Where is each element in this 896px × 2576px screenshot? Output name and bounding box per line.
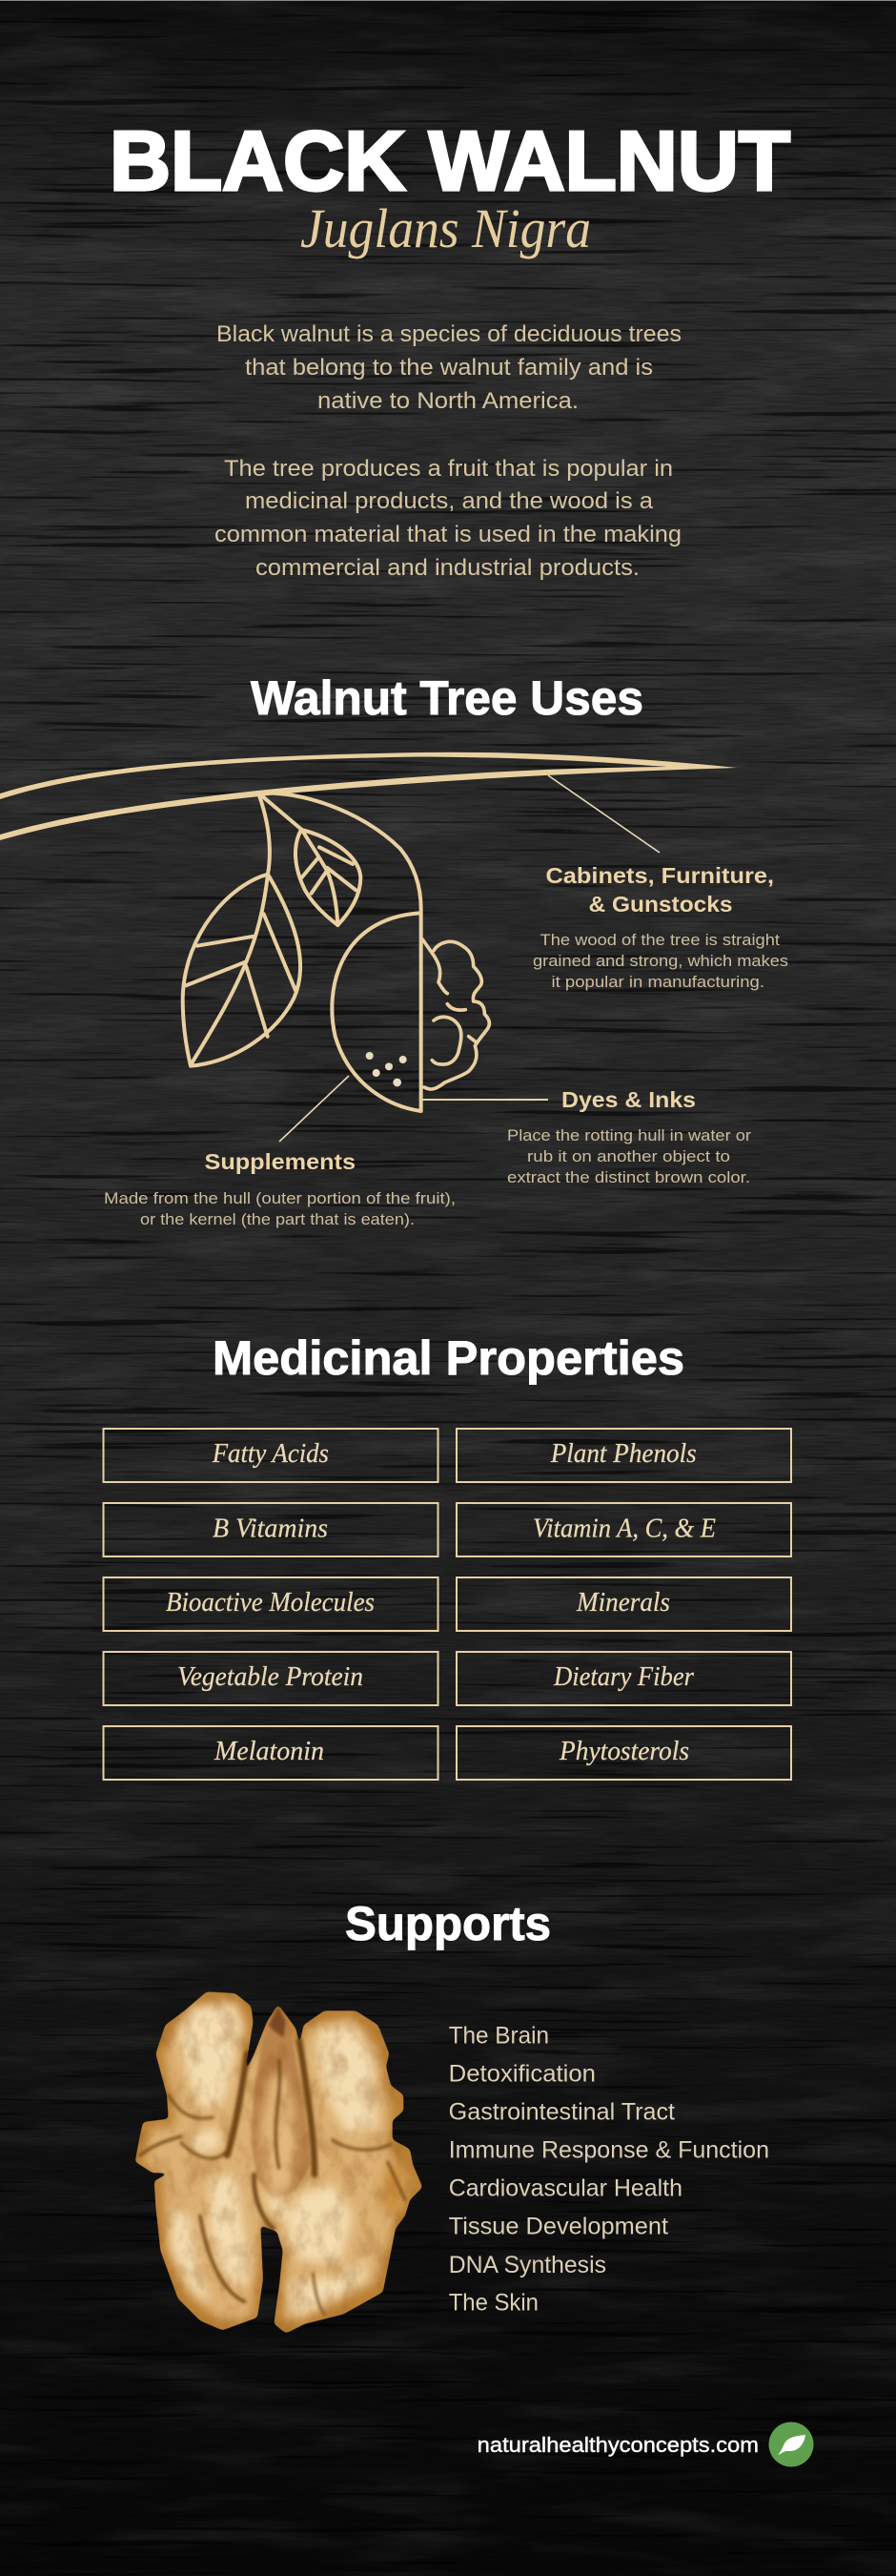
kernel warm patch [381,2158,405,2215]
item: melatonin [103,1726,438,1780]
callout: dyes and inks: rub it on another object to [527,1147,730,1165]
item: vegetable protein: Vegetable Protein [177,1661,363,1692]
footer website: naturalhealthyconcepts.com [478,2433,759,2457]
heading: medicinal properties: Medicinal Properties [213,1331,684,1385]
item: bioactive molecules: Bioactive Molecules [166,1587,375,1618]
item: phytosterols: Phytosterols [559,1736,689,1766]
intro text block: that belong to the walnut family and is [245,355,653,381]
item: plant phenols: Plant Phenols [550,1438,697,1469]
leader: dyes [422,1099,548,1101]
intro text block: medicinal products, and the wood is a [245,488,654,514]
heading: walnut tree uses: Walnut Tree Uses [251,671,643,725]
item: melatonin: Melatonin [214,1736,324,1766]
callout: cabinets, furniture and gunstocks: it popular in manufacturing. [551,973,764,991]
callout: dyes and inks [507,1087,751,1186]
illustration: walnut branch with leaves and fruit [0,752,738,1111]
callout: cabinets, furniture and gunstocks: The wood of the tree is straight [540,931,780,949]
item: plant phenols [457,1429,791,1482]
supports list: DNA Synthesis [449,2252,606,2278]
item: vitamin a c e: Vitamin A, C, & E [533,1514,716,1544]
intro text block: Black walnut is a species of deciduous trees [216,321,682,347]
item: fatty acids: Fatty Acids [212,1438,329,1469]
intro text block: native to North America. [317,388,579,414]
callout: dyes and inks: extract the distinct brown color. [507,1168,750,1186]
kernel base colour [135,1991,421,2333]
callout: cabinets, furniture and gunstocks [533,863,788,991]
item: phytosterols [457,1726,791,1780]
kernel creases [140,2041,405,2315]
item: fatty acids [103,1429,438,1482]
kernel texture [139,1993,414,2333]
item: b vitamins: B Vitamins [213,1514,328,1544]
leader: cabinets [548,775,660,853]
fruit hull [259,793,421,1111]
kernel highlights [172,2003,378,2318]
spike shading [251,2008,312,2200]
item: b vitamins [103,1503,438,1556]
fruit dots [366,1052,407,1086]
intro text block [214,321,682,581]
item: minerals: Minerals [576,1587,670,1618]
supports list: The Skin [449,2290,539,2317]
supports list: Gastrointestinal Tract [449,2099,675,2126]
callout: supplements: Supplements [204,1149,356,1174]
kernel [422,939,489,1089]
callout: supplements: Made from the hull (outer portion of the fruit), [104,1189,456,1207]
item: bioactive molecules [103,1577,438,1631]
title: BLACK WALNUT [110,113,790,208]
kernel mid tones [143,2001,410,2322]
supports list: Detoxification [449,2061,596,2088]
heading: supports: Supports [345,1897,551,1950]
branch [0,752,738,840]
item: dietary fiber: Dietary Fiber [553,1661,695,1692]
callout: dyes and inks: Place the rotting hull in water or [507,1126,751,1144]
small leaf [260,794,360,925]
callout: cabinets, furniture and gunstocks: grained and strong, which makes [533,952,788,970]
callout: supplements: or the kernel (the part that is eaten). [140,1210,415,1228]
callout: cabinets, furniture and gunstocks: Cabinets, Furniture, [545,863,774,888]
supports list: Tissue Development [449,2214,668,2240]
callout: supplements [104,1149,456,1228]
item: vegetable protein [103,1652,438,1705]
supports list: Immune Response & Function [449,2137,769,2164]
supports list: Cardiovascular Health [449,2175,682,2202]
intro text block: The tree produces a fruit that is popular in [224,456,673,482]
icon: green leaf logo [768,2422,814,2466]
item: dietary fiber [457,1652,791,1705]
medicinal properties grid [103,1429,791,1780]
subtitle: Juglans Nigra [300,197,591,259]
intro text block: common material that is used in the making [214,522,682,547]
callout: cabinets, furniture and gunstocks: & Gunstocks [589,892,732,917]
intro text block: commercial and industrial products. [255,555,640,581]
item: minerals [457,1577,791,1631]
walnut kernel picture [135,1991,421,2333]
leaves and fruit line art [183,793,489,1111]
callout: dyes and inks: Dyes & Inks [561,1087,696,1112]
leader: supplements [279,1076,349,1142]
item: vitamin a c e [457,1503,791,1556]
supports list [449,2023,769,2317]
supports list: The Brain [449,2023,549,2050]
large leaf [183,794,300,1066]
